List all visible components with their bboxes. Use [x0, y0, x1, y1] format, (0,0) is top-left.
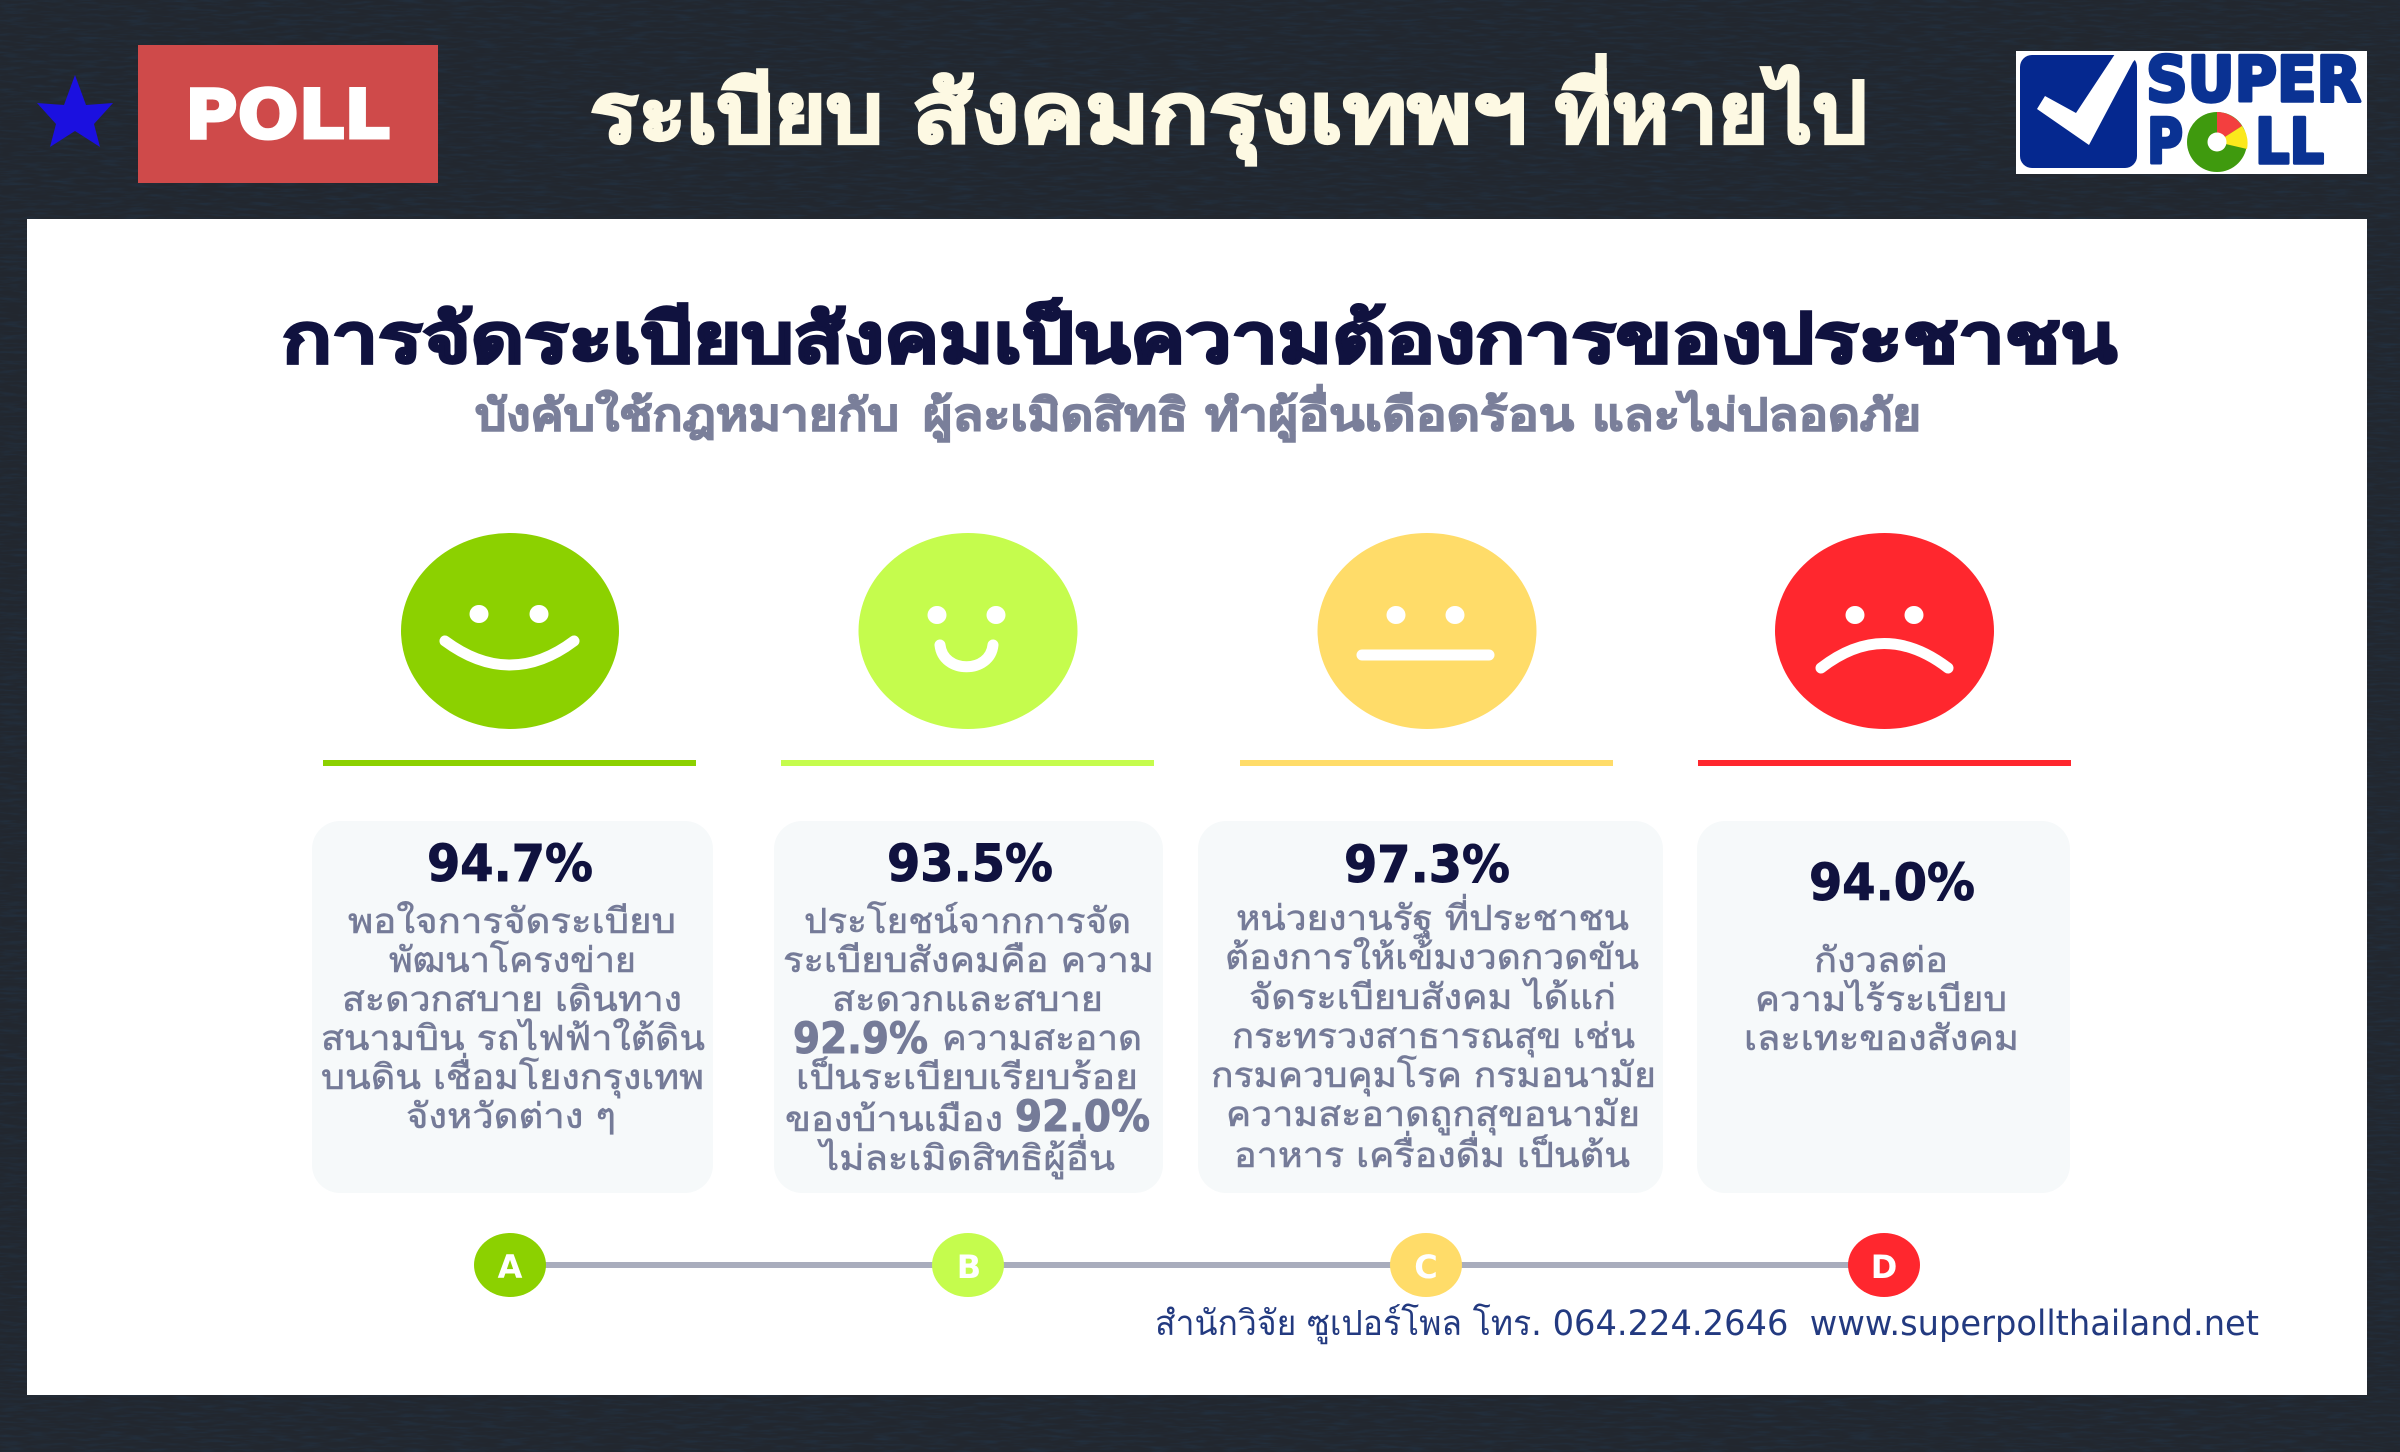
- rule D: [1698, 760, 2071, 766]
- stat 97.3%: 97.3%: [1344, 836, 1510, 895]
- marker D: D: [1871, 1248, 1897, 1286]
- marker D: [1848, 1233, 1920, 1297]
- description A: สะดวกสบาย เดินทาง: [342, 980, 682, 1020]
- description A: จังหวัดต่าง ๆ: [406, 1097, 616, 1137]
- stat 94.7%: 94.7%: [427, 835, 593, 894]
- description B: ระเบียบสังคมคือ ความ: [783, 941, 1154, 981]
- description C: กรมควบคุมโรค กรมอนามัย: [1211, 1055, 1656, 1096]
- card C: [1198, 821, 1663, 1193]
- POLL badge: [138, 45, 438, 183]
- timeline A to D: [474, 1233, 1920, 1297]
- logo: Super Poll: [2016, 43, 2367, 178]
- marker A: [474, 1233, 546, 1297]
- description B: 92.9%: [793, 1014, 928, 1064]
- title: [590, 54, 1867, 166]
- description A: พอใจการจัดระเบียบ: [348, 901, 676, 942]
- rule A: [323, 760, 696, 766]
- description B: ประโยชน์จากการจัด: [804, 901, 1131, 942]
- description B: ของบ้านเมือง: [785, 1100, 1003, 1140]
- column C: face, rule, card: [1198, 533, 1663, 1193]
- description B: 92.0%: [1015, 1092, 1150, 1142]
- description A: สนามบิน รถไฟฟ้าใต้ดิน: [321, 1018, 705, 1059]
- description C: จัดระเบียบสังคม ได้แก่: [1249, 977, 1616, 1018]
- description C: อาหาร เครื่องดื่ม เป็นต้น: [1234, 1131, 1630, 1176]
- description B: สะดวกและสบาย: [832, 980, 1103, 1020]
- description C: [1211, 894, 1656, 1176]
- description C: หน่วยงานรัฐ ที่ประชาชน: [1236, 894, 1629, 939]
- logo: Super Poll: LL: [2255, 105, 2324, 178]
- column B: face, rule, card: [774, 533, 1163, 1193]
- marker A: A: [498, 1248, 523, 1286]
- title: ที่หายไป: [1555, 54, 1867, 162]
- description C: ความสะอาดถูกสุขอนามัย: [1226, 1095, 1640, 1135]
- marker C: [1390, 1233, 1462, 1297]
- description D: กังวลต่อ: [1814, 941, 1948, 981]
- column D: face, rule, card: [1697, 533, 2071, 1193]
- card B: [774, 821, 1163, 1193]
- description A: [321, 901, 705, 1137]
- title: ระเบียบ: [590, 64, 883, 162]
- icon: smiling face: [858, 533, 1078, 729]
- POLL badge: POLL: [185, 76, 390, 155]
- header: [37, 43, 2367, 183]
- subheading: และไม่ปลอดภัย: [1592, 389, 1921, 441]
- stat 94.0%: 94.0%: [1809, 854, 1975, 913]
- description D: ความไร้ระเบียบ: [1755, 979, 2007, 1020]
- title: สังคมกรุงเทพฯ: [912, 64, 1527, 166]
- description D: [1744, 941, 2019, 1059]
- logo: Super Poll: SUPER: [2146, 43, 2361, 116]
- description B: ความสะอาด: [942, 1019, 1142, 1059]
- rule C: [1240, 760, 1613, 766]
- description C: กระทรวงสาธารณสุข เช่น: [1232, 1017, 1635, 1057]
- description B: ไม่ละเมิดสิทธิผู้อื่น: [817, 1134, 1115, 1179]
- subheading: ผู้ละเมิดสิทธิ: [923, 390, 1188, 442]
- icon: blue star: [37, 75, 113, 147]
- white main panel: [27, 219, 2367, 1395]
- description A: พัฒนาโครงข่าย: [389, 940, 636, 981]
- main heading: การจัดระเบียบสังคมเป็นความต้องการของประชาชน: [282, 298, 2117, 379]
- icon: happy face: [401, 533, 619, 729]
- description B: เป็นระเบียบเรียบร้อย: [796, 1056, 1138, 1098]
- subheading: ทำผู้อื่นเดือดร้อน: [1205, 384, 1574, 442]
- stat 93.5%: 93.5%: [887, 835, 1053, 894]
- icon: neutral face: [1318, 533, 1536, 729]
- subheading: [475, 384, 1921, 442]
- rule B: [781, 760, 1154, 766]
- icon: sad face: [1775, 533, 1994, 729]
- marker B: B: [957, 1248, 981, 1286]
- card A: [312, 821, 713, 1193]
- footer credit: สำนักวิจัย ซูเปอร์โพล โทร. 064.224.2646 www.superpollthailand.net: [1155, 1303, 2259, 1344]
- marker B: [932, 1233, 1004, 1297]
- card D: [1697, 821, 2070, 1193]
- subheading: บังคับใช้กฎหมายกับ: [475, 389, 899, 441]
- description A: บนดิน เชื่อมโยงกรุงเทพ: [321, 1053, 704, 1098]
- description C: ต้องการให้เข้มงวดกวดขัน: [1225, 937, 1639, 978]
- description D: เละเทะของสังคม: [1744, 1019, 2019, 1059]
- column A: face, rule, card: [312, 533, 713, 1193]
- description B: [783, 901, 1154, 1179]
- marker C: C: [1414, 1248, 1438, 1286]
- logo: Super Poll: P: [2147, 105, 2183, 178]
